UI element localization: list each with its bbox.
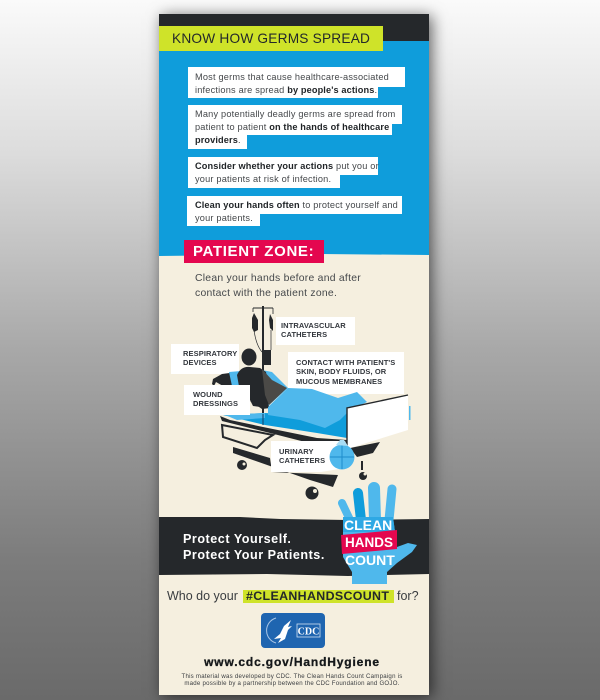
disclaimer <box>181 673 403 687</box>
text block: consider actions: Consider whether your actions put you or <box>195 161 379 171</box>
dark band <box>159 516 429 577</box>
text block: consider actions <box>188 157 379 188</box>
text block: consider actions: your patients at risk of infection. <box>195 174 331 184</box>
text block: people's actions: infections are spread by people's actions. <box>195 85 377 95</box>
logo: CDC: CDC <box>298 626 319 638</box>
logo: clean hands count hand: COUNT <box>345 552 395 568</box>
disclaimer: This material was developed by CDC. The Clean Hands Count Campaign is <box>181 673 403 680</box>
title: KNOW HOW GERMS SPREAD <box>172 31 370 46</box>
pillow <box>258 370 288 406</box>
text block: patient zone instructions: Clean your hands before and after <box>195 273 361 284</box>
website url: www.cdc.gov/HandHygiene <box>204 655 380 669</box>
label: wound dressings: WOUND <box>193 390 223 399</box>
logo: CDC <box>261 613 325 648</box>
hashtag line: for? <box>397 589 419 603</box>
label backgrounds <box>171 317 404 394</box>
text block: hands of healthcare providers: providers. <box>195 135 241 145</box>
poster <box>159 14 429 695</box>
text block: clean hands often <box>187 196 402 226</box>
disclaimer: made possible by a partnership between the CDC Foundation and GOJO. <box>184 680 400 687</box>
label: urinary catheters <box>279 447 325 465</box>
label: contact with patient <box>296 358 395 386</box>
logo: clean hands count hand: HANDS <box>345 535 393 550</box>
illustration: patient in hospital bed <box>171 306 410 500</box>
hashtag line: #CLEANHANDSCOUNT <box>246 589 389 603</box>
panel: blue germs section <box>159 41 429 256</box>
label: intravascular catheters <box>281 321 346 339</box>
hashtag line <box>167 589 419 603</box>
label: intravascular catheters: INTRAVASCULAR <box>281 321 346 330</box>
text block: clean hands often: your patients. <box>195 213 253 223</box>
heading: patient zone: PATIENT ZONE: <box>193 243 314 260</box>
text block: patient zone instructions: contact with the patient zone. <box>195 288 337 298</box>
text block: clean hands often: Clean your hands often to protect yourself and <box>195 200 398 210</box>
text: protect yourself: Protect Your Patients. <box>183 548 325 562</box>
label: contact with patient: MUCOUS MEMBRANES <box>296 377 382 386</box>
logo: clean hands count hand <box>338 482 417 584</box>
footboard <box>347 395 408 449</box>
label: intravascular catheters: CATHETERS <box>281 330 327 339</box>
patient <box>237 367 270 408</box>
text block: hands of healthcare providers <box>188 105 402 149</box>
text block: hands of healthcare providers: patient to patient on the hands of healthcare <box>195 122 389 132</box>
wound label background <box>184 385 250 415</box>
title <box>159 26 383 51</box>
label: contact with patient: SKIN, BODY FLUIDS, OR <box>296 367 386 376</box>
logo: clean hands count hand: CLEAN <box>344 517 392 533</box>
wheels <box>237 460 367 500</box>
blanket <box>268 388 367 428</box>
label: urinary catheters: CATHETERS <box>279 456 325 465</box>
bed frame <box>220 416 347 448</box>
IV pole <box>253 306 273 416</box>
text: protect yourself <box>183 532 325 562</box>
label: wound dressings <box>193 390 238 408</box>
label: respiratory devices: DEVICES <box>183 358 217 367</box>
urinary label <box>271 441 349 472</box>
text block: people's actions <box>188 67 405 98</box>
mattress <box>223 405 347 438</box>
hashtag line: Who do your <box>167 589 238 603</box>
urine bag <box>330 444 354 470</box>
header dark bar <box>159 14 429 41</box>
label: respiratory devices: RESPIRATORY <box>183 349 237 358</box>
text: protect yourself: Protect Yourself. <box>183 532 291 546</box>
label: contact with patient: CONTACT WITH PATIENT'S <box>296 358 395 367</box>
label: wound dressings: DRESSINGS <box>193 399 238 408</box>
head of bed <box>212 372 237 386</box>
label: urinary catheters: URINARY <box>279 447 314 456</box>
text block: people's actions: Most germs that cause healthcare-associated <box>195 72 389 82</box>
text block: patient zone instructions <box>195 273 361 298</box>
heading: patient zone <box>184 240 324 263</box>
label: respiratory devices <box>183 349 238 367</box>
text block: hands of healthcare providers: Many potentially deadly germs are spread from <box>195 109 396 119</box>
